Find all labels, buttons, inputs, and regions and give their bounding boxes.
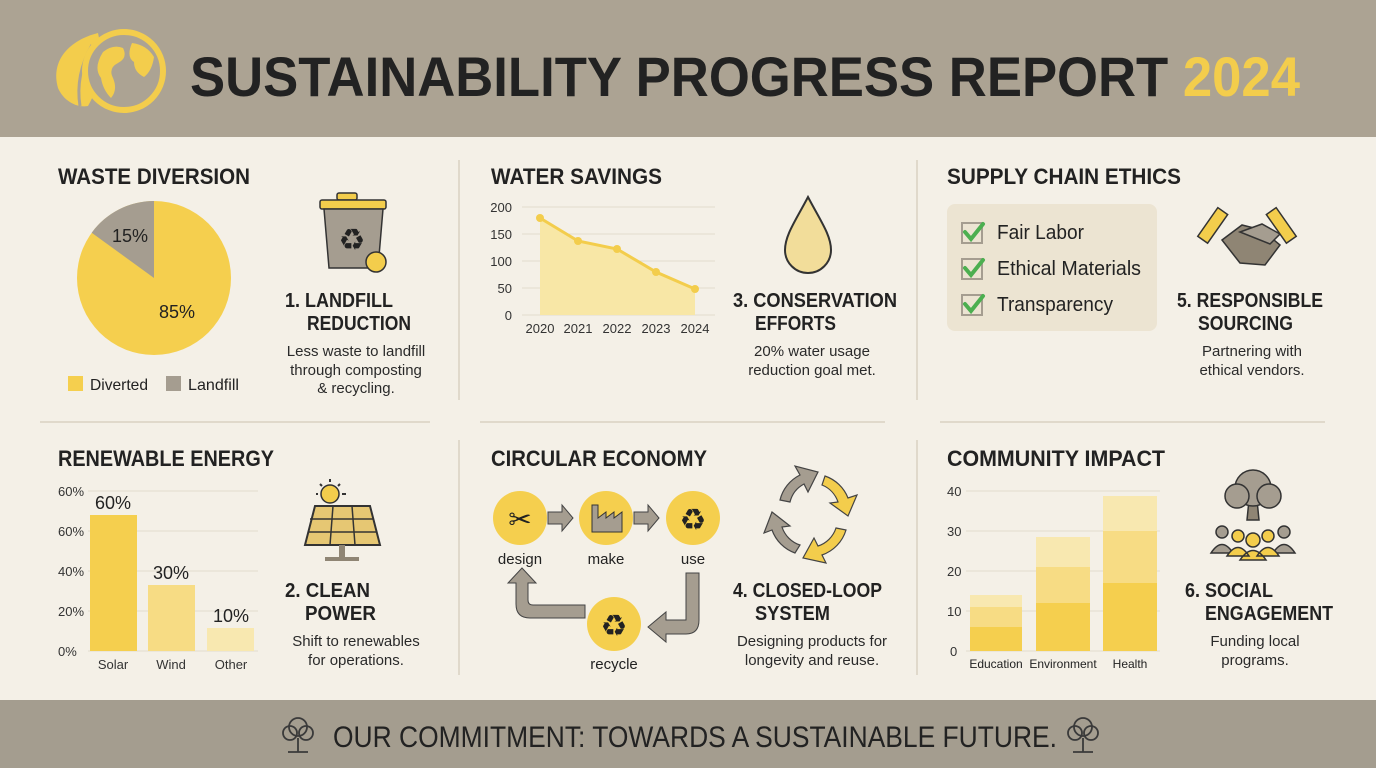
text: sourcing description bbox=[1199, 343, 1305, 379]
icon: recycling bin: ♻ bbox=[339, 224, 365, 257]
heading: landfill reduction bbox=[285, 290, 411, 335]
panel: waste diversion bbox=[58, 164, 425, 397]
title: SUSTAINABILITY PROGRESS REPORT 2024 bbox=[190, 45, 1300, 108]
stacked bar chart: 10 bbox=[947, 604, 961, 619]
checklist box: Ethical Materials bbox=[997, 258, 1141, 280]
panel: supply chain ethics: SUPPLY CHAIN ETHICS bbox=[947, 164, 1181, 189]
checklist box: Transparency bbox=[997, 294, 1113, 316]
heading: clean power: POWER bbox=[305, 603, 377, 625]
line chart: 2024 bbox=[681, 321, 709, 336]
text: clean power description bbox=[292, 633, 420, 669]
line chart: 2020 bbox=[526, 321, 554, 336]
process flow: use bbox=[681, 551, 705, 568]
process flow: ✂ bbox=[508, 504, 532, 535]
stacked bar chart: 0 bbox=[950, 644, 957, 659]
stacked bar chart: Health bbox=[1113, 657, 1147, 671]
stacked bar chart: 30 bbox=[947, 524, 961, 539]
stacked bar chart: Environment bbox=[1029, 657, 1097, 671]
stacked bar chart: 20 bbox=[947, 564, 961, 579]
text: clean power description: Shift to renewables bbox=[292, 633, 420, 650]
pie chart bbox=[77, 201, 231, 355]
text: closed-loop description: Designing products for bbox=[737, 633, 887, 650]
process flow: ♻ bbox=[680, 504, 706, 537]
dividers bbox=[40, 160, 1325, 675]
checklist box: Fair Labor bbox=[997, 222, 1084, 244]
panel: water savings bbox=[490, 164, 897, 379]
heading: clean power: 2. CLEAN bbox=[285, 580, 370, 602]
text: landfill description bbox=[287, 343, 425, 397]
text: social description bbox=[1210, 633, 1300, 669]
heading: responsible sourcing bbox=[1177, 290, 1323, 335]
text: social description: Funding local bbox=[1210, 633, 1300, 650]
bar chart: 10% bbox=[213, 606, 249, 626]
bar chart: 30% bbox=[153, 563, 189, 583]
bar chart: 60% bbox=[58, 484, 84, 499]
icon: tree with people bbox=[1211, 470, 1295, 560]
bar chart: Solar bbox=[98, 657, 129, 672]
icon: water drop bbox=[785, 197, 831, 273]
heading: conservation efforts: EFFORTS bbox=[755, 313, 836, 335]
line chart: 2021 bbox=[564, 321, 592, 336]
heading: social engagement bbox=[1185, 580, 1333, 625]
legend bbox=[68, 376, 239, 394]
panel: circular economy: CIRCULAR ECONOMY bbox=[491, 446, 707, 471]
panel: renewable energy: RENEWABLE ENERGY bbox=[58, 446, 274, 471]
process flow: ♻ bbox=[601, 610, 627, 643]
panel: community impact bbox=[947, 446, 1333, 671]
bar chart: 20% bbox=[58, 604, 84, 619]
heading: closed-loop system: SYSTEM bbox=[755, 603, 830, 625]
footer band bbox=[0, 700, 1376, 768]
heading: closed-loop system bbox=[733, 580, 882, 625]
heading: conservation efforts: 3. CONSERVATION bbox=[733, 290, 897, 312]
text: landfill description: & recycling. bbox=[317, 380, 395, 397]
heading: social engagement: 6. SOCIAL bbox=[1185, 580, 1273, 602]
line chart: 2022 bbox=[603, 321, 631, 336]
text: landfill description: through composting bbox=[290, 362, 422, 379]
heading: conservation efforts bbox=[733, 290, 897, 335]
stacked bar chart bbox=[947, 484, 1160, 671]
text: social description: programs. bbox=[1221, 652, 1289, 669]
icon: cycle arrows bbox=[764, 466, 857, 563]
line chart: 150 bbox=[490, 227, 512, 242]
bar chart: 60% bbox=[58, 524, 84, 539]
icon: handshake bbox=[1198, 208, 1296, 265]
icon: solar panel bbox=[305, 479, 380, 561]
process flow: recycle bbox=[590, 656, 638, 673]
bar chart: Other bbox=[215, 657, 248, 672]
bar chart bbox=[58, 484, 258, 672]
pie chart: 85% bbox=[159, 302, 195, 322]
line chart: 2023 bbox=[642, 321, 670, 336]
bar chart: 60% bbox=[95, 493, 131, 513]
text: conservation description bbox=[748, 343, 876, 379]
panel: supply chain ethics bbox=[947, 164, 1323, 379]
header band bbox=[0, 0, 1376, 137]
text: closed-loop description bbox=[737, 633, 887, 669]
text: landfill description: Less waste to landfill bbox=[287, 343, 425, 360]
text: sourcing description: ethical vendors. bbox=[1199, 362, 1305, 379]
icon: tree right bbox=[1068, 718, 1098, 752]
panel: circular economy bbox=[491, 446, 887, 673]
stacked bar chart: 40 bbox=[947, 484, 961, 499]
legend: Diverted bbox=[90, 377, 148, 394]
heading: closed-loop system: 4. CLOSED-LOOP bbox=[733, 580, 882, 602]
text: conservation description: 20% water usage bbox=[754, 343, 870, 360]
panel: community impact: COMMUNITY IMPACT bbox=[947, 446, 1166, 471]
icon: leaf and globe bbox=[56, 32, 163, 110]
icon: recycling bin bbox=[320, 193, 386, 272]
bar chart: Wind bbox=[156, 657, 186, 672]
text: closed-loop description: longevity and reuse. bbox=[745, 652, 879, 669]
bar chart: 0% bbox=[58, 644, 77, 659]
heading: social engagement: ENGAGEMENT bbox=[1205, 603, 1333, 625]
line chart: 50 bbox=[498, 281, 512, 296]
panel: renewable energy bbox=[58, 446, 420, 672]
heading: landfill reduction: 1. LANDFILL bbox=[285, 290, 393, 312]
text: conservation description: reduction goal met. bbox=[748, 362, 876, 379]
line chart: 100 bbox=[490, 254, 512, 269]
text: sourcing description: Partnering with bbox=[1202, 343, 1302, 360]
heading: responsible sourcing: SOURCING bbox=[1198, 313, 1293, 335]
text: clean power description: for operations. bbox=[308, 652, 404, 669]
line chart: 0 bbox=[505, 308, 512, 323]
footer text: OUR COMMITMENT: TOWARDS A SUSTAINABLE FUTURE. bbox=[333, 721, 1057, 754]
heading: clean power bbox=[285, 580, 377, 625]
process flow: design bbox=[498, 551, 542, 568]
line chart: 200 bbox=[490, 200, 512, 215]
stacked bar chart: Education bbox=[969, 657, 1023, 671]
bar chart: 40% bbox=[58, 564, 84, 579]
process flow: make bbox=[588, 551, 624, 568]
icon: tree left bbox=[283, 718, 313, 752]
process flow bbox=[493, 491, 720, 673]
line chart bbox=[490, 200, 715, 336]
panel: water savings: WATER SAVINGS bbox=[491, 164, 662, 189]
heading: landfill reduction: REDUCTION bbox=[307, 313, 411, 335]
checklist box bbox=[947, 204, 1157, 331]
panel: waste diversion: WASTE DIVERSION bbox=[58, 164, 250, 189]
legend: Landfill bbox=[188, 377, 239, 394]
heading: responsible sourcing: 5. RESPONSIBLE bbox=[1177, 290, 1323, 312]
pie chart: 15% bbox=[112, 226, 148, 246]
